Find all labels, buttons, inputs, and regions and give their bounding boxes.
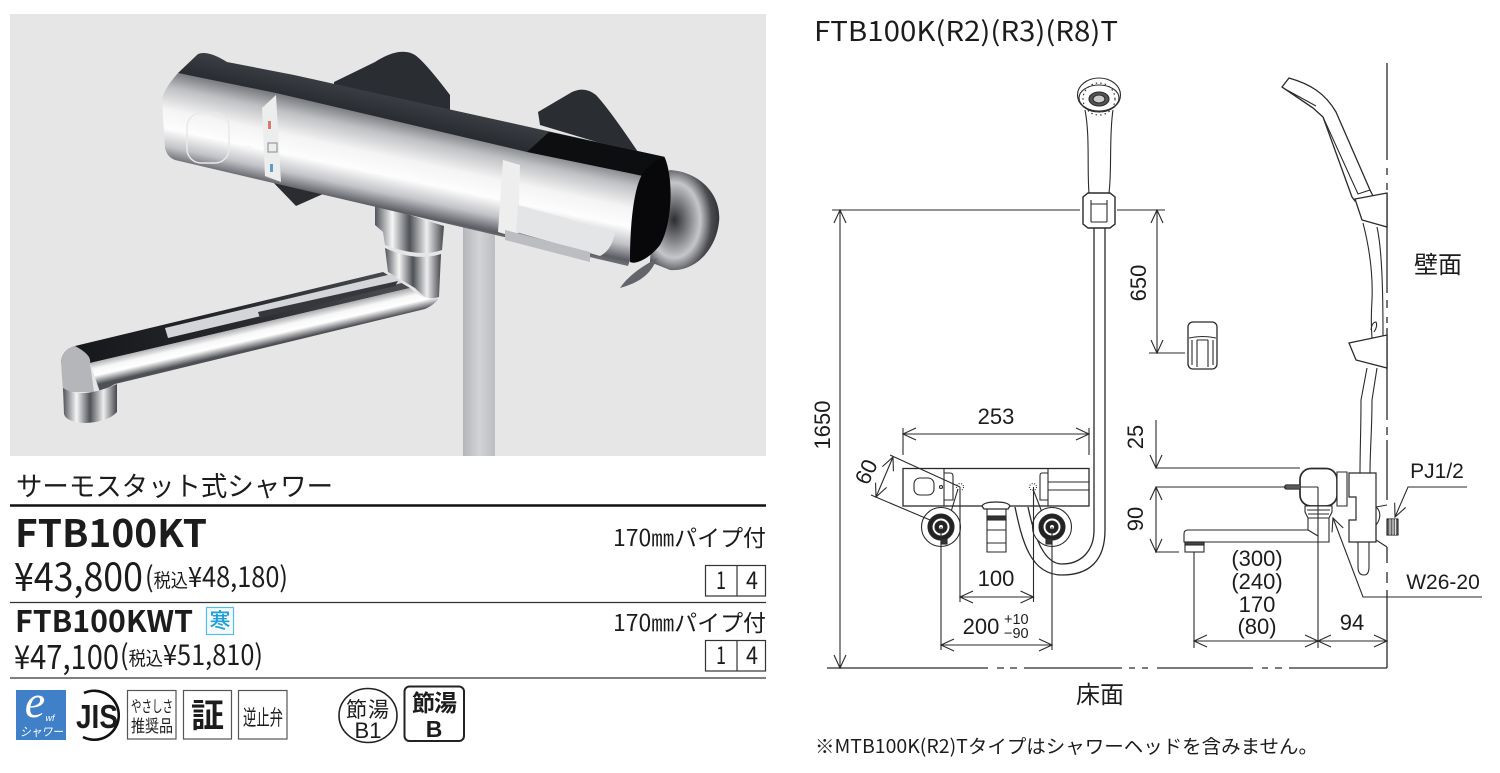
icon: check valve [238,690,287,739]
dimension: 253 width [903,404,1089,455]
icon: e-shower: wf [46,713,56,723]
dimension: 200 with tolerance: −90 [1004,626,1029,642]
model: FTB100KT [14,503,766,603]
dimension: 1650 height: 1650 [810,401,835,449]
model: FTB100KWT: 170㎜パイプ付 [613,604,766,638]
model: FTB100KWT [14,597,766,679]
callout: PJ1/2 [1395,460,1467,517]
icon: water saving B1 [339,688,397,743]
dimension: 100: 100 [978,566,1014,591]
model: FTB100KWT: (税込¥51,810) [120,634,263,674]
dimension: 650 holder spacing: 650 [1126,265,1151,301]
floor line and wall line [827,63,1387,668]
model: FTB100KWT: FTB100KWT [15,597,193,641]
side view: slide bar and hose [1349,193,1387,473]
front view: hose [1015,228,1105,575]
front view: eccentric joints [922,508,1072,546]
dimension: 253 width: 253 [978,404,1014,429]
icon: water saving B: B [426,716,442,742]
model: FTB100KT: 4 [746,561,758,596]
model: FTB100KT: ¥43,800 [14,547,143,603]
front view: faucet body [903,468,1089,552]
dimension: 200 with tolerance: +10 [1004,612,1029,628]
icon: recommended label: 推奨品 [131,712,173,737]
icon: certification: 証 [191,689,224,737]
icon: e-shower [16,676,66,740]
side view: shower head and handle [1282,78,1373,201]
dimension: spout lengths and 94: (80) [1237,614,1277,639]
icon: water saving B [404,684,464,742]
dimension: spout lengths and 94: 94 [1340,610,1364,635]
icon: JIS mark: JIS [76,698,118,735]
label: wall: 壁面 [1414,245,1462,280]
footnote: ※MTB100K(R2)Tタイプはシャワーヘッドを含みません。 [815,732,1318,759]
dimension: 200 with tolerance: 200 [963,614,999,639]
model: FTB100KT: FTB100KT [15,503,207,558]
label: floor: 床面 [1076,675,1124,710]
icon: water saving B1: B1 [355,718,381,743]
photo: thermostatic shower faucet [10,14,766,456]
side view: faucet [1184,468,1398,575]
rule [10,677,766,679]
dimension: spout lengths and 94: (300) [1231,546,1283,571]
dimension: 25 and 90: 90 [1123,507,1148,531]
model: FTB100KWT: 4 [746,636,758,671]
dimension: spout lengths and 94 [1194,487,1387,648]
icon: recommended label [128,690,176,739]
model: FTB100KWT: 寒 [210,605,230,635]
callout: W26-20: W26-20 [1406,571,1480,594]
icon: certification [184,689,232,739]
icon: e-shower: シャワー [20,723,64,740]
icon: JIS mark [76,691,119,740]
dimension: 100 [960,487,1034,602]
rule [10,602,766,604]
icon: water saving B1: 節湯 [346,694,389,724]
callout: PJ1/2: PJ1/2 [1410,460,1464,483]
icon: water saving B: 節湯 [412,684,457,718]
callout: W26-20 [1333,518,1482,597]
dimension: spout lengths and 94: 170 [1239,592,1275,617]
dimension: spout lengths and 94: (240) [1231,569,1283,594]
model: FTB100KT: 170㎜パイプ付 [613,519,766,553]
rule [10,504,766,507]
model: FTB100KT: 1 [716,561,726,596]
dimension: 200 with tolerance [941,527,1052,650]
model: FTB100KT: (税込¥48,180) [145,556,288,596]
front view: shower head [1078,78,1120,228]
dimension: 25 and 90: 25 [1123,425,1148,449]
drawing title: FTB100K(R2)(R3)(R8)T [814,10,1118,49]
heading: product category: サーモスタット式シャワー [16,465,333,504]
icon: e-shower: e [25,676,45,727]
model: FTB100KWT: ¥47,100 [14,631,119,679]
icon: recommended label: やさしさ [131,693,173,717]
icon: check valve: 逆止弁 [243,702,283,732]
dimension: 60 [850,455,960,520]
dimension: 25 and 90 [1123,420,1318,552]
dimension: 60: 60 [850,455,883,488]
model: FTB100KWT: 1 [716,636,726,671]
front view: spare holder [1188,322,1217,369]
